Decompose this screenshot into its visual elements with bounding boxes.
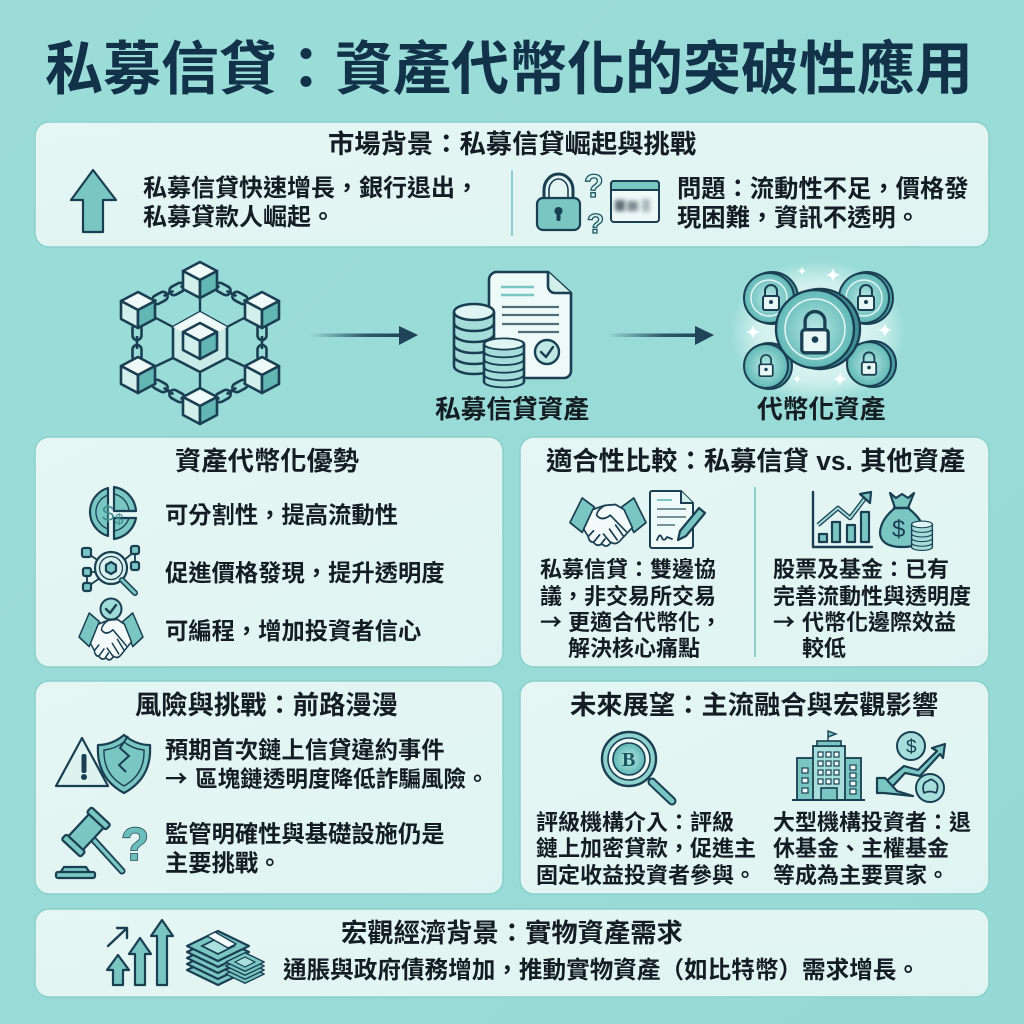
text: institutional investors: 休基金、主權基金 xyxy=(773,836,949,861)
icon: rising arrows xyxy=(107,920,173,985)
text: problem: 現困難，資訊不透明。 xyxy=(677,205,920,232)
text: first default: 區塊鏈透明度降低詐騙風險。 xyxy=(195,766,489,792)
text: growth: 私募信貸快速增長，銀行退出， xyxy=(143,175,479,202)
text: regulation: 主要挑戰。 xyxy=(165,850,281,876)
icon: tokenized coins xyxy=(730,260,906,404)
text: private credit comparison: → xyxy=(540,605,562,637)
arrow: private credit to tokenized xyxy=(607,326,714,345)
text: regulation: 監管明確性與基礎設施仍是 xyxy=(165,821,445,847)
icon: money bag and coins: $ xyxy=(892,516,905,543)
icon: network magnifier xyxy=(82,546,139,593)
icon: blurred browser window xyxy=(611,181,659,222)
panel: market background xyxy=(35,122,989,247)
text: private credit comparison: 議，非交易所交易 xyxy=(540,584,716,609)
heading: outlook: 未來展望：主流融合與宏觀影響 xyxy=(570,690,938,720)
text: private credit comparison xyxy=(540,557,722,661)
text: rating agencies: 固定收益投資者參與。 xyxy=(536,863,756,888)
text: institutional investors xyxy=(773,810,971,888)
text: equities comparison: 完善流動性與透明度 xyxy=(773,584,971,609)
text: problem: 問題：流動性不足，價格發 xyxy=(677,176,969,203)
panel: risks and challenges xyxy=(35,681,503,894)
text: equities comparison: 股票及基金：已有 xyxy=(773,557,949,582)
text: equities comparison: → xyxy=(773,605,795,637)
icon: capital flow arrow and coins xyxy=(877,732,945,802)
title: 私募信貸：資產代幣化的突破性應用 xyxy=(45,37,973,102)
heading: suitability: 適合性比較：私募信貸 vs. 其他資產 xyxy=(546,446,965,476)
label: private credit asset: 私募信貸資產 xyxy=(435,395,589,424)
icon: gavel and question mark: ? xyxy=(121,818,149,870)
label: tokenized asset: 代幣化資產 xyxy=(757,395,885,424)
heading: market background: 市場背景：私募信貸崛起與挑戰 xyxy=(328,129,696,159)
text: growth xyxy=(143,175,479,231)
icon: bar chart with arrow xyxy=(813,492,872,547)
icon: handshake xyxy=(570,498,646,546)
text: problem xyxy=(677,176,969,232)
text: first default xyxy=(165,737,489,794)
panel: future outlook xyxy=(520,681,989,894)
icon: cash stacks xyxy=(187,931,264,985)
heading: risks: 風險與挑戰：前路漫漫 xyxy=(135,690,398,720)
text: programmable: 可編程，增加投資者信心 xyxy=(165,618,421,644)
text: equities comparison xyxy=(773,557,971,661)
icon: lock and question marks: ? xyxy=(587,208,604,239)
icon: bitcoin magnifier: B xyxy=(622,749,635,771)
text: first default: 預期首次鏈上信貸違約事件 xyxy=(165,737,445,763)
icon: warning and broken shield xyxy=(56,735,150,793)
text: private credit comparison: 私募信貸：雙邊協 xyxy=(540,557,716,582)
icon: blockchain network xyxy=(121,262,279,424)
heading: advantages: 資產代幣化優勢 xyxy=(175,446,359,476)
icon: institutional building xyxy=(792,731,865,800)
icon: split coin: $ xyxy=(102,501,114,526)
icon: contract and pen xyxy=(650,491,705,548)
icon: gavel and question mark xyxy=(56,807,149,878)
icon: money bag and coins xyxy=(880,493,932,550)
panel: tokenization advantages xyxy=(35,437,503,667)
heading: macro: 宏觀經濟背景：實物資產需求 xyxy=(341,918,683,948)
text: private credit comparison: 解決核心痛點 xyxy=(568,636,700,661)
text: rating agencies xyxy=(536,810,756,888)
icon: split coin: $ xyxy=(115,511,124,528)
text: equities comparison: 較低 xyxy=(802,636,846,661)
icon: handshake with check xyxy=(79,598,143,660)
icon: lock and question marks: ? xyxy=(584,168,604,204)
text: rating agencies: 鏈上加密貸款，促進主 xyxy=(536,836,756,861)
panel: macro background xyxy=(35,909,989,997)
icon: growth arrow xyxy=(71,170,116,232)
text: regulation xyxy=(165,821,445,876)
text: institutional investors: 大型機構投資者：退 xyxy=(773,810,971,835)
icon: lock and question marks xyxy=(537,168,604,239)
text: price discovery: 促進價格發現，提升透明度 xyxy=(165,560,445,586)
text: macro: 通脹與政府債務增加，推動實物資產（如比特幣）需求增長。 xyxy=(283,956,920,984)
text: institutional investors: 等成為主要買家。 xyxy=(773,863,949,888)
text: rating agencies: 評級機構介入：評級 xyxy=(536,810,734,835)
icon: private credit document and coins xyxy=(454,272,571,387)
icon: bitcoin magnifier xyxy=(602,732,672,801)
text: growth: 私募貸款人崛起。 xyxy=(143,204,335,231)
text: private credit comparison: 更適合代幣化， xyxy=(568,610,722,635)
arrow: blockchain to private credit xyxy=(310,326,418,345)
icon: split coin xyxy=(90,487,136,539)
text: first default: → xyxy=(165,761,188,794)
text: equities comparison: 代幣化邊際效益 xyxy=(802,610,956,635)
icon: capital flow arrow and coins: $ xyxy=(906,737,917,758)
text: divisibility: 可分割性，提高流動性 xyxy=(165,502,398,528)
panel: suitability comparison xyxy=(520,437,989,667)
